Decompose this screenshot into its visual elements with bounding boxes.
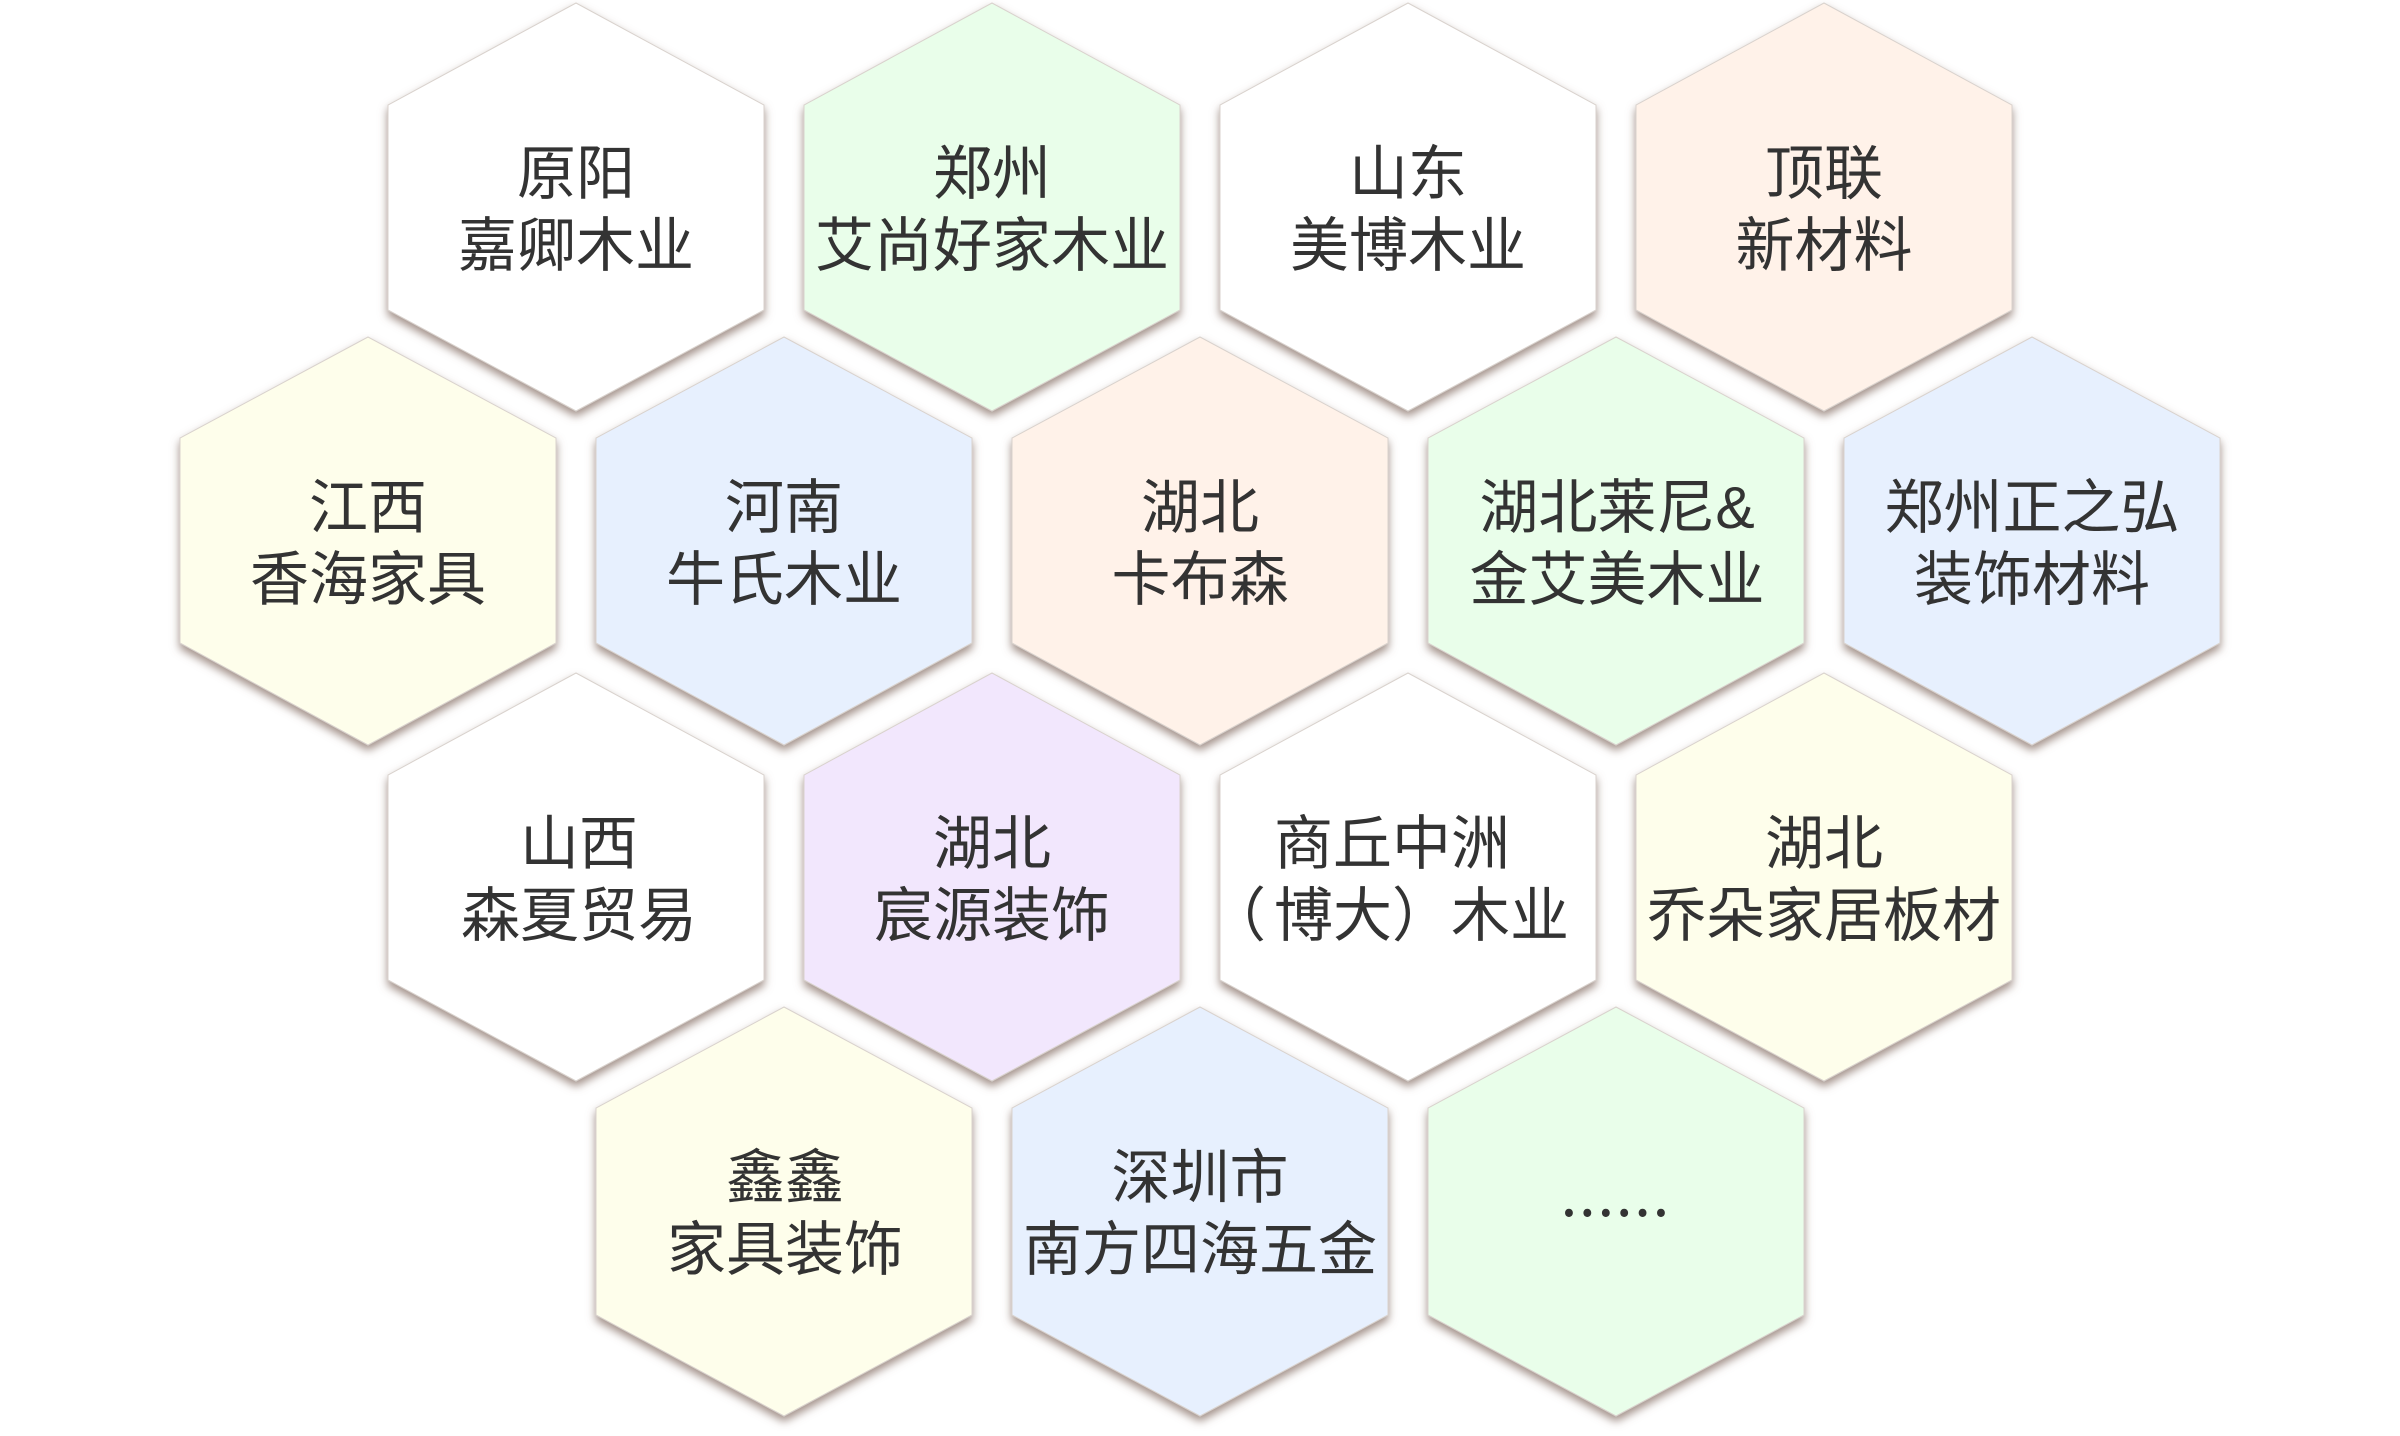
hexagon: ellipsis bbox=[1428, 1007, 1804, 1416]
hexagon: 湖北莱尼&金艾美木业: 金艾美木业 bbox=[1469, 547, 1765, 613]
hexagon: 山东美博木业: 美博木业 bbox=[1290, 213, 1526, 279]
hexagon: 郑州艾尚好家木业: 郑州 bbox=[933, 141, 1051, 207]
hexagon: 河南牛氏木业: 牛氏木业 bbox=[666, 547, 902, 613]
hexagon: 商丘中洲（博大）木业 bbox=[1207, 673, 1596, 1081]
hexagon: 深圳市南方四海五金: 深圳市 bbox=[1111, 1145, 1289, 1211]
hexagon: 原阳嘉卿木业: 原阳 bbox=[517, 141, 635, 207]
hexagon: 郑州正之弘装饰材料: 郑州正之弘 bbox=[1884, 475, 2180, 541]
hexagon: 湖北乔朵家居板材: 湖北 bbox=[1765, 811, 1883, 877]
hexagon: 郑州正之弘装饰材料 bbox=[1844, 337, 2220, 745]
hexagon: 原阳嘉卿木业: 嘉卿木业 bbox=[458, 213, 694, 279]
hexagon: 顶联新材料: 新材料 bbox=[1735, 213, 1913, 279]
hexagon: 湖北莱尼&金艾美木业: 湖北莱尼& bbox=[1479, 475, 1755, 541]
hexagon: 山东美博木业: 山东 bbox=[1349, 141, 1467, 207]
hexagon: 河南牛氏木业: 河南 bbox=[725, 475, 843, 541]
hexagon: 山西森夏贸易: 森夏贸易 bbox=[461, 883, 697, 949]
hexagon: 深圳市南方四海五金 bbox=[1012, 1007, 1388, 1416]
hexagon: 湖北卡布森: 卡布森 bbox=[1111, 547, 1289, 613]
hexagon: 江西香海家具: 江西 bbox=[309, 475, 427, 541]
hexagon: 深圳市南方四海五金: 南方四海五金 bbox=[1023, 1217, 1377, 1283]
hexagon: 山西森夏贸易 bbox=[388, 673, 764, 1081]
hexagon: 湖北卡布森: 湖北 bbox=[1141, 475, 1259, 541]
hexagon: 郑州正之弘装饰材料: 装饰材料 bbox=[1914, 547, 2150, 613]
hexagon: ellipsis: ...... bbox=[1561, 1148, 1671, 1233]
hexagon: 山西森夏贸易: 山西 bbox=[520, 811, 638, 877]
hexagon: 鑫鑫家具装饰: 鑫鑫 bbox=[726, 1145, 844, 1211]
hexagon: 湖北乔朵家居板材: 乔朵家居板材 bbox=[1647, 883, 2001, 949]
hexagon: 商丘中洲（博大）木业: （博大）木业 bbox=[1207, 883, 1569, 949]
hexagon: 湖北宸源装饰 bbox=[804, 673, 1180, 1081]
hexagon: 郑州艾尚好家木业: 艾尚好家木业 bbox=[815, 213, 1169, 279]
hexagon: 顶联新材料 bbox=[1636, 3, 2012, 411]
hexagon: 湖北宸源装饰: 湖北 bbox=[933, 811, 1051, 877]
hexagon: 山东美博木业 bbox=[1220, 3, 1596, 411]
hexagon: 顶联新材料: 顶联 bbox=[1765, 141, 1883, 207]
hexagon: 湖北宸源装饰: 宸源装饰 bbox=[874, 883, 1110, 949]
hexagon: 河南牛氏木业 bbox=[596, 337, 972, 745]
hexagon: 江西香海家具 bbox=[180, 337, 556, 745]
hexagon: 鑫鑫家具装饰: 家具装饰 bbox=[667, 1217, 903, 1283]
hexagon: 郑州艾尚好家木业 bbox=[804, 3, 1180, 411]
hexagon: 湖北莱尼&金艾美木业 bbox=[1428, 337, 1804, 745]
hexagon: 江西香海家具: 香海家具 bbox=[250, 547, 486, 613]
hexagon: 鑫鑫家具装饰 bbox=[596, 1007, 972, 1416]
hexagon: 湖北卡布森 bbox=[1012, 337, 1388, 745]
hexagon: 湖北乔朵家居板材 bbox=[1636, 673, 2012, 1081]
hexagon: 商丘中洲（博大）木业: 商丘中洲 bbox=[1274, 811, 1510, 877]
hexagon: 原阳嘉卿木业 bbox=[388, 3, 764, 411]
